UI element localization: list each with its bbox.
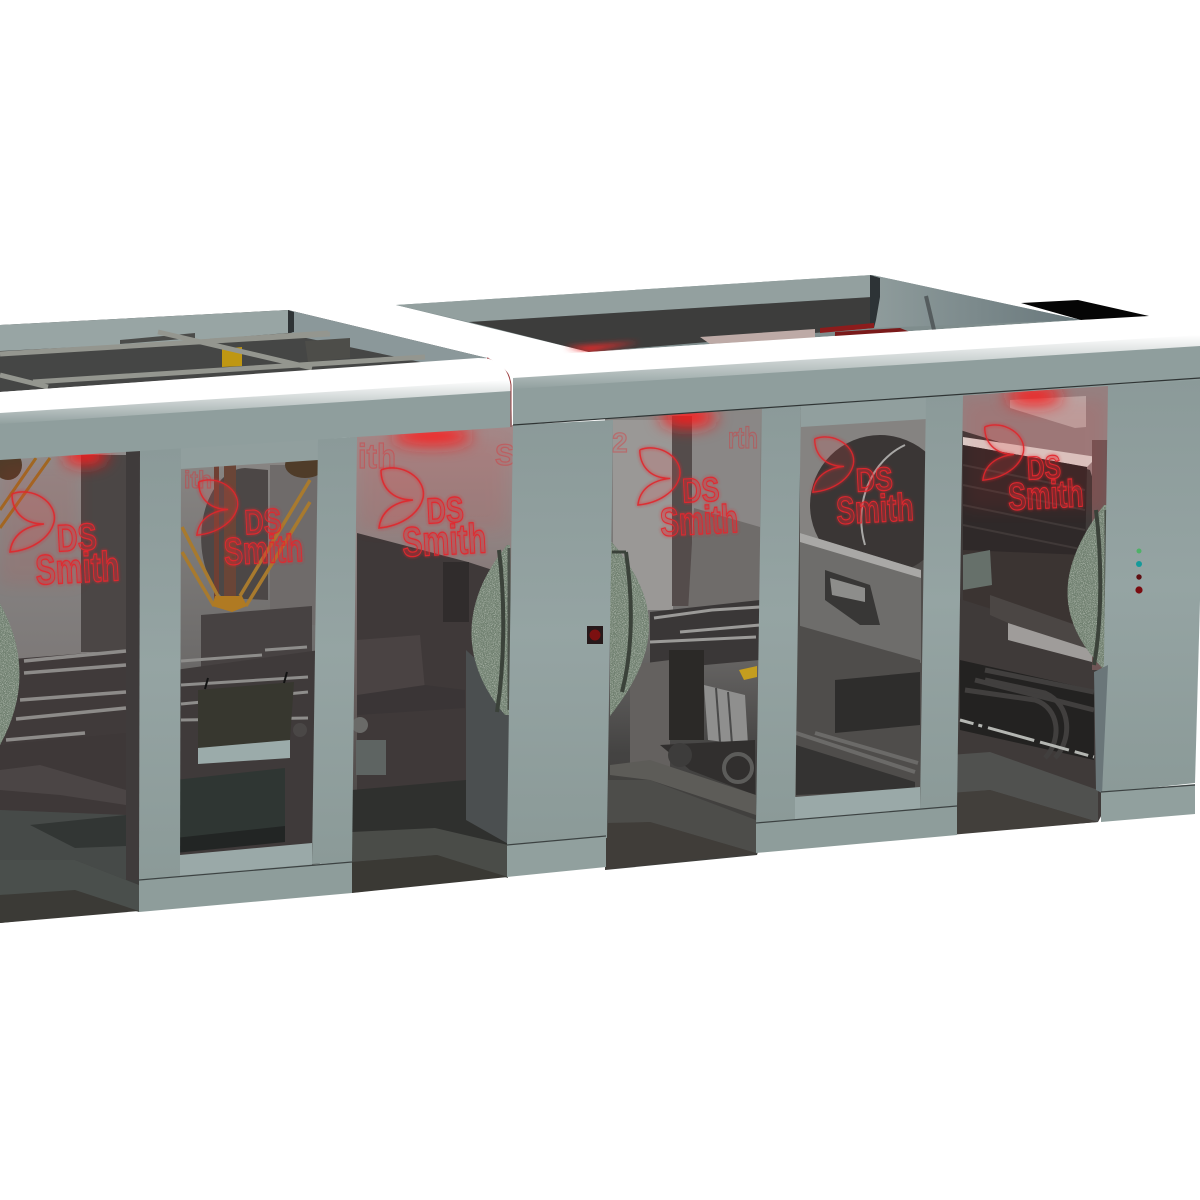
roof band: left module xyxy=(0,358,512,460)
pillar one xyxy=(139,448,181,882)
logo: DS Smith reflection, window three: DS xyxy=(426,489,465,531)
logo: DS Smith reflection, window four xyxy=(638,448,739,545)
logo: DS Smith reflection, door one xyxy=(197,480,304,574)
logo: DS Smith reflection, window four: Smith xyxy=(659,497,739,545)
pane: door one window with delta robot xyxy=(175,436,325,880)
icon: servo motor xyxy=(825,570,880,625)
roof band: right module xyxy=(488,316,1200,425)
pane: third window xyxy=(350,425,514,893)
red light glows xyxy=(0,387,1105,585)
base plinth one xyxy=(139,861,352,912)
logo: DS Smith reflection, window six xyxy=(983,425,1085,519)
door handle: left edge xyxy=(0,600,20,745)
pillar two xyxy=(312,437,357,864)
icon: vertical rod xyxy=(926,296,934,330)
icon: black vent on roof xyxy=(1021,300,1149,320)
logo: DS Smith reflection, door two xyxy=(813,437,915,533)
logo: DS Smith reflection, window one: DS xyxy=(56,516,98,561)
status lights xyxy=(1135,548,1143,594)
left module top opening xyxy=(0,310,487,392)
logo: DS Smith reflection, window one xyxy=(10,492,121,594)
logo: DS Smith reflection, door two: Smith xyxy=(835,486,915,533)
control pillar plinth xyxy=(507,835,606,877)
logo: DS Smith reflection, door two: DS xyxy=(855,461,894,500)
door one top band xyxy=(181,438,318,469)
icon: delta robot arms xyxy=(182,480,310,606)
right module top opening xyxy=(396,275,1149,352)
pane: sixth window with cable chain xyxy=(950,385,1112,835)
logo: DS Smith reflection, door one: Smith xyxy=(223,527,304,574)
ghost logo reflections: S xyxy=(495,439,515,472)
icon: yellow sensor box xyxy=(222,347,242,367)
ghost logo reflections xyxy=(184,422,758,494)
logo: DS Smith reflection, door one: DS xyxy=(244,502,282,543)
ghost logo reflections: ith xyxy=(358,438,396,476)
door handle: window three xyxy=(471,545,510,715)
pillar four xyxy=(756,403,801,825)
control pillar xyxy=(507,420,613,846)
ghost logo reflections: 2 xyxy=(612,427,628,458)
door handle: window four xyxy=(610,540,649,716)
logo: DS Smith reflection, window one: Smith xyxy=(34,542,121,594)
ghost logo reflections: rth xyxy=(728,422,758,455)
logo: DS Smith reflection, window six: DS xyxy=(1026,449,1062,488)
panel: dark display on stand xyxy=(198,682,294,748)
icon: red indicator window xyxy=(587,626,603,644)
logo: DS Smith reflection, window six: Smith xyxy=(1007,472,1085,519)
pane: door two window with wheel and motor xyxy=(790,395,950,825)
door two top band xyxy=(801,397,927,427)
logo: DS Smith reflection, window three xyxy=(379,468,487,566)
pane: far left window xyxy=(0,445,145,923)
pillar five xyxy=(920,394,963,809)
ghost logo reflections: ith xyxy=(184,467,212,494)
end pillar with status lights xyxy=(1102,378,1200,793)
pane: fourth window with folding machinery xyxy=(605,405,765,870)
logo: DS Smith reflection, window four: DS xyxy=(681,471,720,511)
left module frame xyxy=(139,437,357,912)
right module frame xyxy=(507,378,1200,877)
base plinth two xyxy=(756,805,957,853)
door two bottom rail xyxy=(795,787,920,822)
door one bottom rail xyxy=(180,843,312,878)
conveyor strip xyxy=(960,720,1094,757)
door handle: window six xyxy=(1067,505,1110,672)
logo: DS Smith reflection, window three: Smith xyxy=(401,514,487,566)
end pillar plinth xyxy=(1101,784,1195,822)
